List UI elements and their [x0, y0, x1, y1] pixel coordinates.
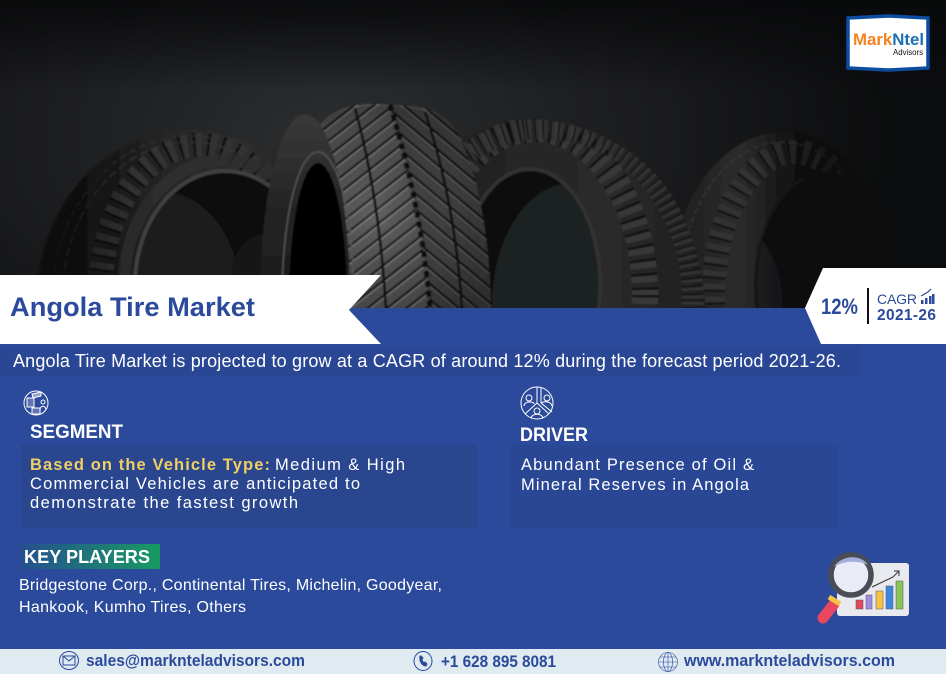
key players list: Bridgestone Corp., Continental Tires, Michelin, Goodyear,	[19, 577, 442, 594]
driver heading: DRIVER	[520, 425, 588, 446]
panel: segment	[21, 445, 477, 528]
CAGR badge: 12%	[821, 294, 858, 319]
tire 2 front	[262, 103, 492, 310]
segment heading: SEGMENT	[30, 422, 123, 443]
panel: segment: Based on the Vehicle Type:	[30, 456, 270, 474]
summary sentence	[0, 346, 860, 376]
CAGR badge: CAGR	[877, 291, 917, 307]
panel: driver	[510, 445, 838, 528]
tire 1 far left	[37, 129, 343, 471]
email address: sales@marknteladvisors.com	[86, 652, 305, 670]
tire 3 center right	[464, 119, 705, 308]
CAGR badge: 2021-26	[877, 307, 936, 324]
icon: small growth chart	[921, 289, 934, 304]
footer bar	[0, 649, 946, 674]
CAGR badge	[805, 268, 946, 344]
phone number: +1 628 895 8081	[441, 653, 556, 671]
icon: phone	[414, 652, 432, 670]
title: Angola Tire Market	[10, 292, 255, 322]
icon: globe	[658, 652, 678, 672]
photo: four tires	[38, 103, 829, 310]
blue main panel	[0, 308, 946, 649]
panel: segment: Commercial Vehicles are anticipated to	[30, 475, 360, 493]
tire 4 far right	[667, 131, 899, 469]
icon: segment globe	[24, 391, 48, 415]
panel: segment: Medium & High	[275, 456, 405, 474]
title banner	[0, 275, 381, 344]
key players heading: KEY PLAYERS	[24, 547, 150, 567]
logo: Advisors	[893, 48, 923, 57]
photo background	[0, 0, 946, 310]
icon: magnifier over bar chart	[823, 555, 909, 618]
icon: driver people wheel	[521, 387, 553, 419]
panel: segment: demonstrate the fastest growth	[30, 494, 298, 512]
icon: email	[60, 652, 78, 670]
key players list: Hankook, Kumho Tires, Others	[19, 599, 246, 616]
key players list	[19, 577, 442, 616]
panel: driver: Abundant Presence of Oil &	[521, 456, 754, 474]
summary sentence: Angola Tire Market is projected to grow at a CAGR of around 12% during the forecast period 2021-26.	[13, 351, 841, 371]
panel: driver: Mineral Reserves in Angola	[521, 476, 750, 494]
logo: MarkNtel	[853, 30, 924, 49]
website address: www.marknteladvisors.com	[683, 652, 895, 670]
logo	[848, 16, 928, 70]
